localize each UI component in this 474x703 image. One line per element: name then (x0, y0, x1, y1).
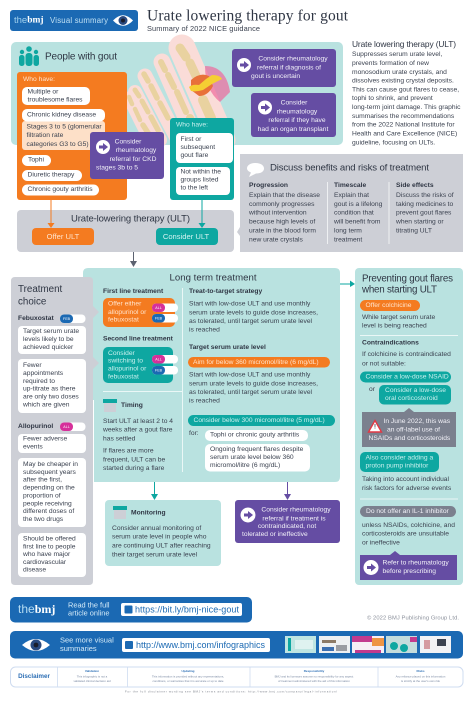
timing: If flares are more (103, 448, 154, 454)
first line treatment: First line treatment (103, 288, 164, 295)
button: consider ULT (156, 228, 218, 245)
icon: people (19, 46, 39, 66)
febuxostat: which are given (22, 402, 70, 408)
column: progression (248, 182, 320, 244)
allopurinol: subsequent years (23, 469, 76, 476)
column: progression: without intervention (248, 210, 307, 216)
contraindications: oral corticosteroid (385, 395, 438, 402)
column: progression: Explain that the disease (249, 192, 320, 199)
first line treatment: febuxostat (108, 316, 139, 324)
column: side effects: Side effects (396, 182, 434, 189)
allopurinol: disease (23, 566, 46, 574)
febuxostat: achieved quicker (23, 344, 74, 351)
target serum urate level: serum urate levels to guide dose increases, (189, 380, 318, 388)
panel: monitoring: are continuing ULT after reaching (112, 542, 211, 550)
criterion: not in groups: groups listed (180, 176, 219, 184)
offer colchicine: Offer colchicine (366, 302, 412, 309)
panel: disclaimer: validated clinical decision aid (73, 679, 111, 683)
timing: weeks after a gout flare (102, 426, 173, 434)
febuxostat: Fewer (23, 362, 42, 369)
target serum urate level: Target serum urate level (189, 344, 266, 351)
IL-1 inhibitor: or ineffective (362, 540, 400, 546)
criterion: not in groups (176, 167, 230, 195)
IL-1 inhibitor (360, 506, 456, 546)
button: offer ULT: Offer ULT (47, 232, 80, 241)
text block: urate lowering therapy: prevents formation of new (352, 60, 429, 67)
column: progression: Progression (249, 182, 288, 189)
warning: off-label use: NSAIDs and corticosteroids (368, 435, 451, 442)
column: side effects: Discuss the risks of (396, 192, 454, 199)
contraindications: or (369, 386, 376, 393)
callout: referral for CKD (90, 132, 164, 179)
criterion: first flare: First or (180, 136, 202, 143)
callout: referral for CKD: rheumatology (116, 147, 157, 154)
criterion: diuretic therapy: Diuretic therapy (28, 172, 75, 178)
IL-1 inhibitor: Do not offer an IL-1 inhibitor (366, 508, 450, 515)
second line treatment: ALL (155, 357, 162, 361)
allopurinol: people receiving (23, 500, 72, 508)
panel: people with gout (11, 42, 343, 145)
second line treatment: allopurinol or (108, 366, 147, 372)
panel: disclaimer: BMJ and its licensors assume no responsibility for any aspect (275, 674, 354, 678)
warning: off-label use: ! (374, 424, 376, 430)
callout: referral if uncertain: Consider rheumatology (258, 56, 328, 62)
callout: refer before prescribing (360, 551, 457, 580)
target serum urate level: Start with low-dose ULT and use monthly (189, 372, 311, 378)
panel: disclaimer: Disclaimer (18, 673, 50, 680)
text block: urate lowering therapy: guideline, focusing on ULTs. (352, 140, 435, 146)
callout: referral if organ transplant (251, 93, 336, 137)
first line treatment: Offer either (108, 300, 142, 308)
text block: urate lowering therapy: monosodium urate crystals, and (352, 69, 447, 76)
callout: referral if treatment contraindicated (235, 500, 340, 543)
febuxostat: appointments (23, 370, 64, 377)
second line treatment: FEB (155, 368, 163, 372)
treat-to-target strategy: serum urate levels to guide dose increases, (189, 310, 318, 316)
panel: disclaimer: Updating (182, 669, 195, 673)
callout: referral if uncertain: gout is uncertain (251, 73, 300, 80)
callout: referral if treatment contraindicated: contraindicated, not (258, 523, 316, 530)
button: consider ULT: Consider ULT (163, 232, 209, 241)
panel: preventing gout flares (355, 268, 463, 585)
arrow: who have to offer ULT (48, 200, 54, 228)
column: timescale: gout is a lifelong (334, 201, 383, 208)
allopurinol: the two drugs (23, 516, 64, 523)
timing: has settled (103, 436, 136, 442)
thumbnails: other visual summaries (285, 636, 451, 653)
bar: see more visual summaries: http://www.bmj.com/infographics (136, 640, 266, 650)
callout: referral for CKD: stages 3b to 5 (96, 164, 138, 172)
column: timescale (333, 182, 383, 244)
panel: monitoring: serum urate level in people who (112, 534, 207, 540)
text block: urate lowering therapy: dissolves existing crystal deposits. (352, 78, 454, 84)
panel: monitoring: Monitoring (131, 510, 166, 516)
panel: long term treatment (83, 268, 340, 482)
second line treatment: Consider (108, 350, 136, 357)
panel: discuss benefits and risks (237, 154, 463, 252)
callout: referral if treatment contraindicated: Consider rheumatology (261, 506, 331, 514)
febuxostat: up-titrate as there (23, 386, 76, 392)
panel: disclaimer: Validation (85, 669, 99, 673)
arrow: long term to preventing flares (340, 280, 355, 287)
contraindications: If colchicine is contraindicated (362, 351, 451, 358)
column: side effects: when starting or (395, 218, 444, 226)
panel: disclaimer: This infographic is not a (77, 674, 108, 678)
contraindications: or not suitable: (362, 360, 406, 368)
first line treatment (103, 288, 178, 327)
treat-to-target strategy: Start with low-dose ULT and use monthly (189, 300, 311, 308)
column: timescale: Explain that (334, 192, 369, 199)
panel: monitoring (105, 500, 221, 566)
callout: referral if organ transplant: rheumatology (277, 108, 318, 116)
allopurinol: first line to people (23, 544, 76, 550)
header badge: the bmj visual summary (10, 10, 138, 31)
first line treatment: ALL (155, 306, 162, 310)
illustration: foot bones with gout (129, 48, 230, 140)
callout: referral if organ transplant: had an organ transplant (258, 126, 328, 133)
criterion: first flare: subsequent (180, 144, 215, 151)
panel: who have (offer) (17, 72, 127, 200)
bar: read the full article: thebmj (18, 602, 55, 616)
proton pump inhibitor: proton pump inhibitor (366, 462, 429, 470)
text block: urate lowering therapy: This can cause gout flares to cease, (352, 86, 459, 94)
febuxostat (18, 314, 86, 413)
criterion: multiple flares (22, 87, 90, 105)
arrow: who have to consider ULT (198, 200, 206, 228)
bar: read the full article: https://bit.ly/bmj-nice-gout (135, 604, 239, 614)
allopurinol: Allopurinol (18, 423, 53, 430)
panel: disclaimer: conditions, or warranties that it is accurate or up to date (152, 679, 224, 683)
treat-to-target strategy: as tolerated, until target serum urate level (189, 318, 313, 325)
column: side effects: prevent gout flares (396, 210, 452, 216)
column: progression: urate in the blood form (249, 228, 316, 234)
timing: started during a flare (103, 465, 165, 472)
panel: disclaimer: Risks (416, 669, 425, 673)
callout: referral if organ transplant: Consider (281, 100, 308, 106)
column: side effects: titrating ULT (396, 228, 432, 234)
panel: treatment choice: Treatment (18, 284, 63, 295)
panel: disclaimer: Any reliance placed on this information (396, 674, 446, 678)
second line treatment: febuxostat (108, 374, 139, 380)
criterion: chronic kidney disease: categories G3 to G5) (26, 141, 89, 148)
target serum urate level: serum urate level below 360 (210, 454, 294, 461)
criterion: chronic kidney disease: filtration rate (26, 132, 64, 139)
treat-to-target strategy (189, 288, 318, 334)
header badge: the bmj visual summary: Visual summary (50, 16, 108, 25)
criterion: tophi: Tophi (28, 156, 45, 164)
timing: Timing (121, 402, 143, 409)
criterion: chronic gouty arthritis: Chronic gouty arthritis (28, 186, 93, 193)
second line treatment: switching to (108, 358, 143, 364)
criterion: not in groups: Not within the (180, 168, 221, 176)
text block: urate lowering therapy: from the 2022 National Institute for (352, 122, 455, 128)
criterion: first flare: gout flare (180, 152, 209, 159)
allopurinol: depending on the (23, 484, 75, 492)
panel: who have (consider): Who have: (176, 122, 208, 128)
criterion: multiple flares: troublesome flares (28, 96, 83, 104)
target serum urate level (188, 344, 335, 472)
offer colchicine: level is being reached (362, 322, 427, 330)
timing (102, 399, 173, 472)
treat-to-target strategy: is reached (189, 326, 220, 334)
criterion: not in groups: to the left (180, 184, 208, 192)
column: progression: commonly progresses (249, 201, 315, 208)
panel: long term treatment: Long term treatment (170, 272, 257, 284)
text block: urate lowering therapy: Health and Care Excellence (NICE) (352, 130, 457, 138)
timing: frequent, ULT can be (103, 456, 165, 464)
panel: who have (offer): Who have: (23, 76, 55, 83)
target serum urate level: Tophi or chronic gouty arthritis (210, 432, 300, 438)
target serum urate level: micromol/litre (6 mg/dL) (210, 462, 280, 469)
febuxostat: are only two doses (23, 394, 79, 400)
criterion: chronic kidney disease (22, 109, 105, 150)
IL-1 inhibitor: unless NSAIDs, colchicine, and (362, 522, 455, 529)
text block: urate lowering therapy: tophi to shrink, and prevent (352, 95, 433, 102)
offer colchicine (360, 300, 436, 330)
panel: disclaimer: Responsibility (304, 669, 325, 673)
target serum urate level: is reached (189, 398, 220, 404)
warning: off-label use (362, 408, 456, 447)
panel: disclaimer (10, 667, 463, 687)
allopurinol: cardiovascular (23, 559, 67, 566)
copyright: © 2022 BMJ Publishing Group Ltd. (367, 614, 459, 622)
column: timescale: will benefit from (333, 218, 381, 226)
bar: see more visual summaries: See more visual (60, 636, 114, 644)
panel: preventing gout flares: when starting ULT (361, 284, 437, 296)
criterion: multiple flares: Multiple or (28, 88, 59, 96)
timing: Start ULT at least 2 to 4 (103, 418, 173, 425)
second line treatment: Second line treatment (103, 336, 174, 342)
allopurinol: Should be offered (23, 536, 76, 542)
text block: urate lowering therapy: Suppresses serum urate level, (352, 51, 442, 58)
header badge: the bmj visual summary: thebmj (14, 15, 44, 26)
febuxostat: FEB (63, 317, 71, 321)
target serum urate level: Ongoing frequent flares despite (210, 446, 304, 453)
allopurinol: proportion of (23, 492, 61, 500)
contraindications: Contraindications (362, 340, 419, 346)
callout: referral if organ transplant: referral if they have (268, 117, 326, 124)
text block: urate lowering therapy: summarises the recommendations (352, 113, 455, 120)
icon: speech bubble (247, 163, 264, 177)
column: timescale: long term (334, 228, 362, 234)
offer colchicine: While target serum urate (362, 314, 436, 321)
panel: urate-lowering therapy: Urate-lowering therapy (ULT) (71, 214, 190, 224)
bar: read the full article: Read the full (68, 600, 110, 610)
treat-to-target strategy: Treat-to-target strategy (189, 288, 262, 295)
panel: treatment choice: choice (18, 296, 47, 308)
button: offer ULT (32, 228, 94, 245)
title: Urate lowering therapy for gout (147, 8, 349, 24)
arrow: ULT to long term treatment (130, 252, 137, 267)
allopurinol: Fewer adverse (23, 436, 68, 442)
contraindications (360, 340, 451, 404)
bar: read the full article: article online (68, 608, 110, 618)
column: timescale: treatment (334, 236, 362, 244)
target serum urate level: as tolerated, until target serum urate level (189, 389, 313, 396)
proton pump inhibitor: Taking into account individual (362, 476, 450, 483)
allopurinol: who have major (22, 551, 71, 558)
panel: preventing gout flares: Preventing gout flares (362, 274, 453, 284)
panel: urate-lowering therapy (17, 210, 234, 252)
callout: referral for CKD: referral for CKD (110, 156, 157, 163)
target serum urate level: Aim for below 360 micromol/litre (6 mg/dL) (193, 359, 319, 366)
callout: referral if uncertain (232, 49, 336, 87)
callout: referral if treatment contraindicated: referral if treatment is (262, 516, 326, 522)
callout: referral if treatment contraindicated: tolerated or ineffective (242, 531, 308, 538)
panel: disclaimer: is strictly at the user's own risk (401, 679, 441, 683)
arrow: long term to monitoring (151, 482, 158, 500)
first line treatment: allopurinol or (108, 309, 147, 316)
proton pump inhibitor: Also consider adding a (366, 454, 433, 462)
subtitle: Summary of 2022 NICE guidance (147, 24, 260, 33)
first line treatment: FEB (155, 316, 163, 320)
allopurinol: May be cheaper in (23, 461, 78, 468)
target serum urate level: Consider below 300 micromol/litre (5 mg/dL) (194, 417, 325, 424)
allopurinol (18, 422, 86, 577)
panel: who have (consider) (170, 118, 234, 200)
criterion: chronic kidney disease: Stages 3 to 5 (glomerular (26, 124, 102, 130)
panel: monitoring: their target serum urate level (112, 552, 198, 558)
callout: refer before prescribing: Refer to rheumatology (382, 560, 449, 566)
text block: urate lowering therapy (352, 39, 461, 146)
bar: read the full article (10, 597, 252, 622)
text block: urate lowering therapy: Urate lowering therapy (ULT) (352, 39, 456, 49)
arrow: long term to referral (284, 482, 291, 500)
IL-1 inhibitor: corticosteroids are unsuitable (362, 530, 449, 538)
column: timescale: condition that (334, 210, 374, 216)
column: timescale: Timescale (334, 182, 367, 189)
criterion: chronic kidney disease: Chronic kidney disease (27, 112, 96, 118)
second line treatment (103, 336, 178, 383)
callout: refer before prescribing: before prescribing (382, 568, 436, 575)
allopurinol: different doses of (23, 508, 74, 515)
column: side effects (395, 182, 454, 234)
contraindications: Consider a low-dose NSAID (366, 374, 449, 380)
proton pump inhibitor: risk factors for adverse events (362, 485, 452, 492)
warning: off-label use: In June 2022, this was (384, 418, 451, 425)
allopurinol: events (23, 444, 43, 450)
bar: see more visual summaries: summaries (60, 644, 97, 653)
febuxostat: levels likely to be (23, 336, 74, 343)
febuxostat: Febuxostat (18, 315, 54, 322)
panel: discuss benefits and risks: Discuss benefits and risks of treatment (270, 162, 429, 174)
column: progression: because high levels of (249, 218, 315, 226)
contraindications: Consider a low-dose (385, 387, 446, 394)
text block: urate lowering therapy: long-term joint damage. This graphic (352, 104, 461, 111)
allopurinol: after the first, (23, 476, 62, 484)
criterion: first flare (176, 133, 233, 163)
febuxostat: Target serum urate (23, 328, 79, 335)
heading: people with gout: People with gout (45, 52, 117, 62)
bar: see more visual summaries (10, 631, 463, 658)
warning: off-label use: an off-label use of (387, 426, 440, 434)
target serum urate level: for: (189, 430, 199, 437)
proton pump inhibitor (360, 452, 452, 492)
panel: monitoring: Consider annual monitoring of (112, 525, 201, 532)
febuxostat: required to (23, 378, 55, 385)
column: side effects: taking medicines to (396, 201, 454, 208)
callout: referral for CKD: Consider (115, 138, 142, 146)
panel: treatment choice (11, 277, 99, 585)
panel: disclaimer: of treatment administered with the aid of this information (278, 679, 350, 683)
column: progression: new urate crystals (249, 236, 304, 244)
allopurinol: ALL (63, 425, 70, 429)
panel: disclaimer: This information is provided without any representations, (152, 674, 224, 678)
footer note: For the full disclaimer wording see BMJ's terms and conditions: http://www.bmj.com/company/legal-information/ (125, 690, 337, 694)
callout: referral if uncertain: referral if diagnosis of (257, 64, 321, 72)
